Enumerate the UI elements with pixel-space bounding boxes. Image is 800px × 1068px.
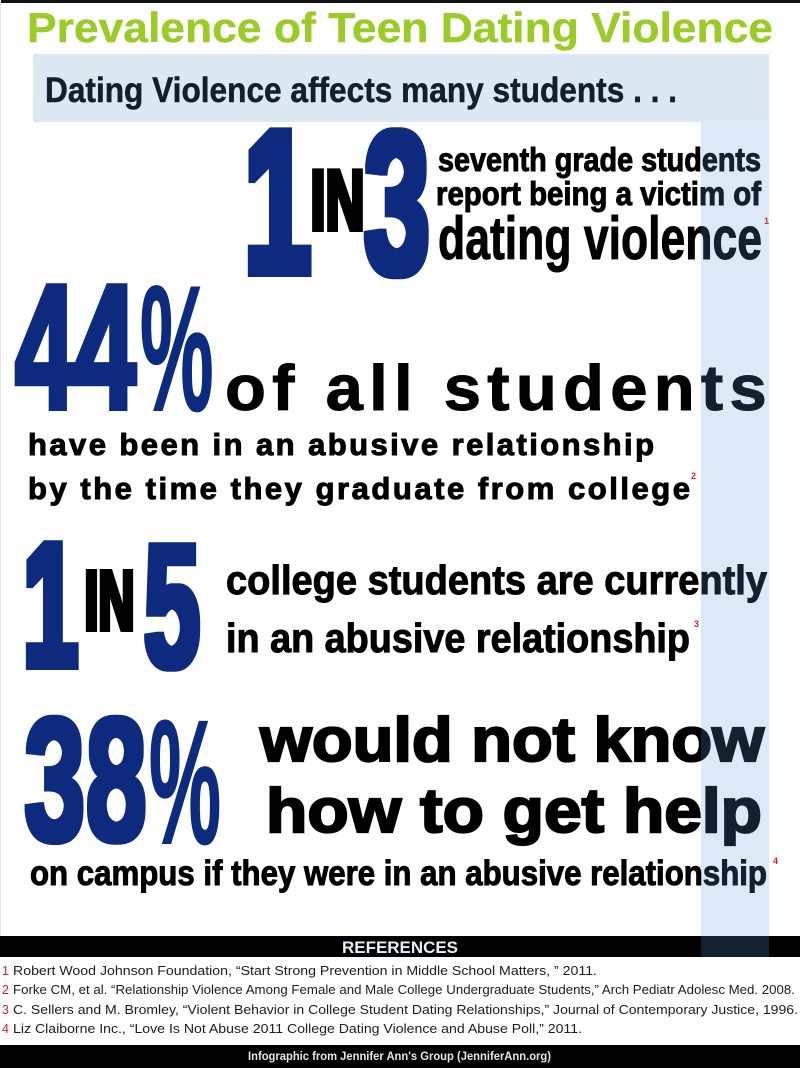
text: would not know how to get help: would not know	[259, 706, 765, 775]
statistic: 38% would not know how to get help	[24, 683, 778, 893]
statistic: 44% of all students: %	[140, 249, 214, 448]
reference 3: C. Sellers and M. Bromley, “Violent Behavior in College Student Dating Relationships,” Journal of Contemporary Justice, 1996.	[13, 1003, 798, 1017]
numeral: 1 in 5: 1	[22, 507, 78, 702]
numeral: 1 in 5: 5	[144, 507, 200, 705]
numeral: 1 in 3: 3	[364, 90, 430, 317]
reference 4: Liz Claiborne Inc., “Love Is Not Abuse 2011 College Dating Violence and Abuse Poll,” 2011.	[13, 1022, 582, 1036]
header band: dating violence affects many students	[33, 54, 769, 122]
footnote marker 1: 1	[764, 216, 769, 226]
numeral: 1 in 5	[22, 507, 200, 705]
vertical translucent stripe	[701, 122, 769, 957]
text: have been in an abusive relationship: by the time they graduate from college	[28, 471, 690, 506]
footnote marker 3: 3	[694, 619, 699, 629]
text: would not know how to get help	[259, 706, 765, 846]
statistic: 44% of all students	[15, 248, 773, 506]
statistic: 1 in 3 seventh grade students	[243, 90, 769, 317]
header band: dating violence affects many students: Dating Violence affects many students . . .	[45, 71, 677, 110]
text: college students are currently in an abusive relationship	[226, 557, 767, 661]
footnote marker 2: 2	[691, 471, 696, 481]
text: college students are currently in an abusive relationship: in an abusive relationship	[226, 615, 690, 661]
numeral: 1 in 3: IN	[310, 150, 364, 252]
footnote marker 4: 4	[773, 856, 778, 866]
title: Prevalence of Teen Dating Violence	[27, 4, 773, 51]
text: seventh grade students report being a victim of dating violence: seventh grade students	[438, 141, 761, 178]
text: would not know how to get help: how to get help	[266, 777, 762, 846]
numeral: 1 in 3: 1	[243, 91, 312, 314]
numeral: 44%: 44	[15, 248, 136, 446]
statistic: 38% would not know how to get help: %	[149, 685, 221, 881]
reference 4: 4	[2, 1022, 9, 1036]
text: of all students: of all students	[225, 352, 773, 424]
footer credit bar: Infographic from Jennifer Ann's Group (JenniferAnn.org)	[248, 1049, 551, 1063]
text: have been in an abusive relationship	[28, 427, 690, 506]
numeral: 1 in 3	[243, 90, 430, 317]
text: seventh grade students report being a victim of dating violence: report being a victim of	[436, 175, 762, 212]
numeral: 38%: 38	[24, 683, 147, 878]
references heading bar: REFERENCES	[342, 938, 458, 957]
reference 2: Forke CM, et al. “Relationship Violence Among Female and Male College Undergraduate Students,” Arch Pediatr Adolesc Med. 2008.	[13, 983, 795, 997]
text: college students are currently in an abusive relationship: college students are currently	[226, 557, 767, 603]
reference 1: Robert Wood Johnson Foundation, “Start Strong Prevention in Middle School Matters, ” 2011.	[13, 964, 597, 978]
text: have been in an abusive relationship: have been in an abusive relationship	[28, 427, 654, 462]
references list	[2, 964, 798, 1036]
statistic: 1 in 5 college students	[22, 507, 767, 705]
footer credit bar	[0, 1045, 800, 1068]
numeral: 1 in 5: IN	[84, 552, 134, 652]
references heading bar	[0, 936, 800, 957]
reference 3: 3	[2, 1003, 9, 1017]
text: seventh grade students report being a victim of dating violence	[436, 141, 762, 272]
reference 1: 1	[2, 964, 9, 978]
reference 2: 2	[2, 983, 9, 997]
